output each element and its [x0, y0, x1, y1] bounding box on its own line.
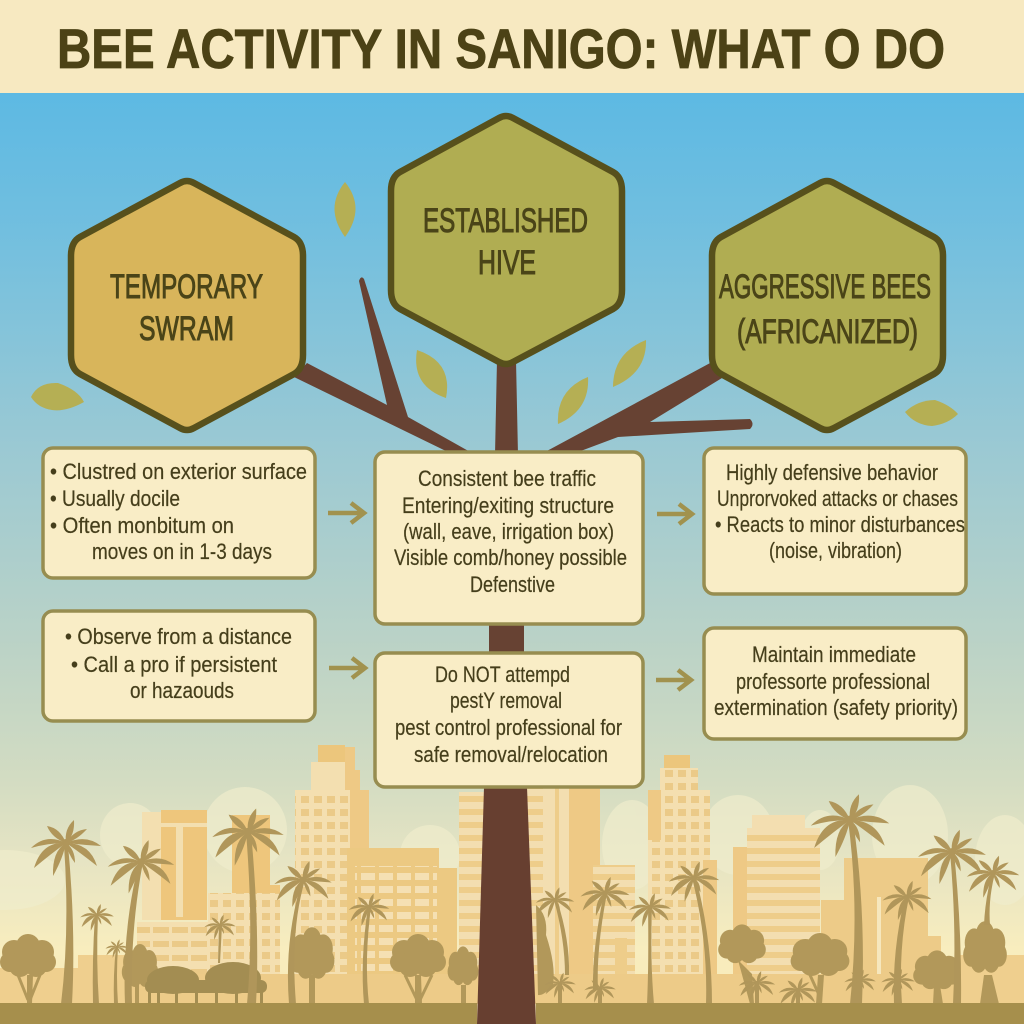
- ground right of trunk: [536, 1003, 1024, 1024]
- panel: swarm action: or hazaouds: [130, 678, 234, 703]
- lower tree trunk: [477, 787, 536, 1024]
- arrow: swarm to hive, bottom row: [329, 658, 365, 678]
- panel: aggressive bees identification: Unprorvoked attacks or chases: [717, 486, 958, 511]
- panel: hive action: pestY removal: [450, 688, 562, 713]
- panel: aggressive bees action: extermination (safety priority): [714, 695, 958, 720]
- ground: [0, 1003, 477, 1024]
- hexagon: established hive: HIVE: [478, 244, 536, 282]
- panel: swarm identification: • Often monbitum on: [50, 513, 234, 538]
- panel: swarm action: [43, 611, 315, 721]
- panel: aggressive bees identification: (noise, vibration): [769, 538, 902, 563]
- arrow: hive to aggressive, top row: [657, 504, 692, 524]
- hexagon: temporary swarm: SWRAM: [139, 310, 234, 348]
- panel: hive action: safe removal/relocation: [414, 742, 608, 767]
- hexagon: aggressive bees: [712, 181, 943, 430]
- panel: hive action: Do NOT attempd: [435, 662, 570, 687]
- panel: swarm action: • Call a pro if persistent: [71, 652, 277, 677]
- hexagon: aggressive bees: (AFRICANIZED): [737, 313, 918, 351]
- city skyline: [0, 745, 1024, 1005]
- hexagon: temporary swarm: [71, 181, 303, 430]
- panel: swarm identification: moves on in 1-3 days: [92, 539, 272, 564]
- tree trunk and branches: [294, 277, 752, 660]
- panel: hive identification: Defenstive: [470, 572, 555, 597]
- panel: hive action: pest control professional for: [395, 715, 622, 740]
- bush grove: [145, 962, 267, 1004]
- panel: hive identification: Visible comb/honey possible: [394, 545, 627, 570]
- leaves: [31, 182, 958, 426]
- panel: aggressive bees action: [704, 628, 966, 739]
- hexagon: established hive: [391, 116, 622, 364]
- arrow: swarm to hive, top row: [328, 503, 364, 523]
- panel: hive identification: (wall, eave, irrigation box): [403, 519, 614, 544]
- hexagon: temporary swarm: TEMPORARY: [110, 268, 263, 306]
- panel: hive identification: Consistent bee traffic: [418, 466, 596, 491]
- panel: swarm identification: [43, 448, 315, 578]
- palm trees: [31, 794, 1019, 1008]
- panel: hive identification: [375, 452, 643, 624]
- hexagon: established hive: ESTABLISHED: [423, 202, 588, 240]
- panel: aggressive bees identification: • Reacts to minor disturbances: [715, 512, 965, 537]
- round trees: [0, 905, 1007, 1004]
- arrow: hive to aggressive, bottom row: [656, 670, 691, 690]
- panel: aggressive bees action: professorte professional: [736, 669, 930, 694]
- clouds: [0, 785, 1024, 910]
- panel: aggressive bees identification: Highly defensive behavior: [726, 460, 938, 485]
- panel: aggressive bees identification: [704, 448, 966, 594]
- panel: aggressive bees action: Maintain immediate: [752, 642, 916, 667]
- title band: [0, 0, 1024, 93]
- panel: hive action: [375, 653, 643, 787]
- panel: swarm action: • Observe from a distance: [65, 624, 292, 649]
- panel: hive identification: Entering/exiting structure: [402, 493, 614, 518]
- panel: swarm identification: • Usually docile: [50, 486, 180, 511]
- panel: swarm identification: • Clustred on exterior surface: [50, 459, 307, 484]
